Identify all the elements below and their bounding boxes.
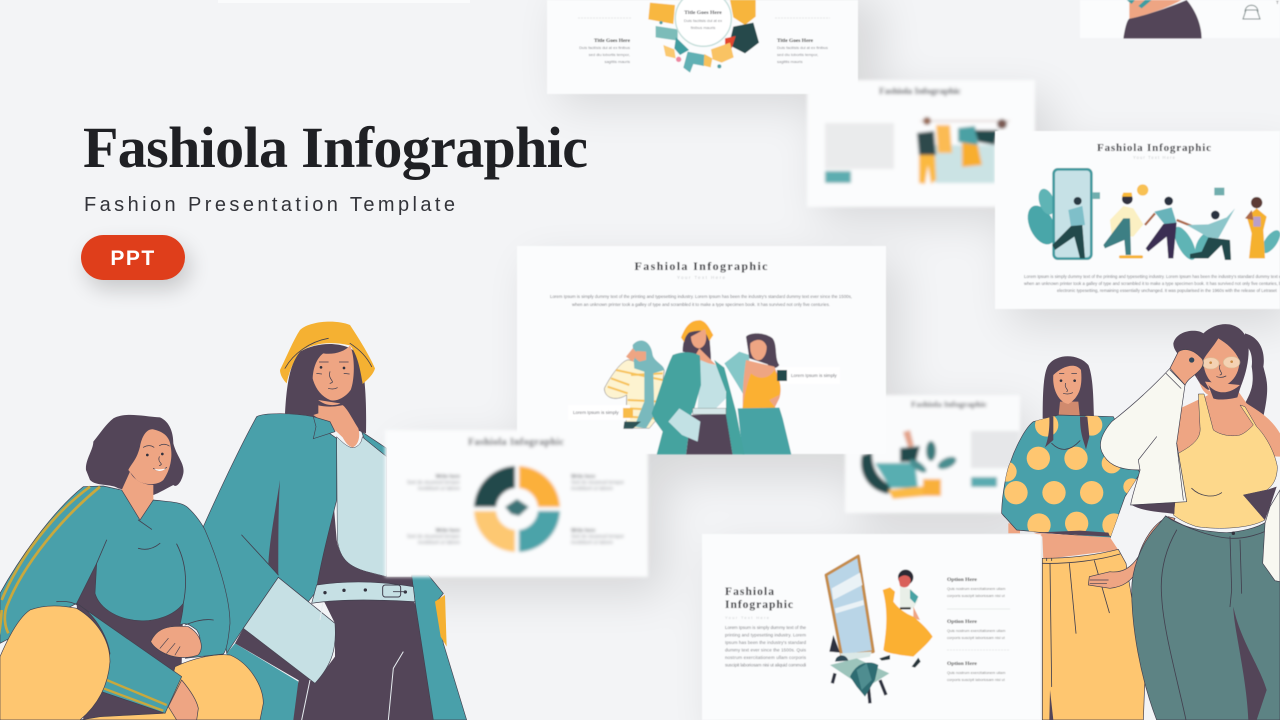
- slide title: Fashiola Infographic: [468, 437, 565, 448]
- slide body text: [725, 625, 807, 668]
- slide body text: Lorem Ipsum is simply dummy text of the printing and typesetting industry. Lorem Ipsum has been the industry's standard dummy text ever since the 1500s,: [550, 294, 852, 299]
- wheel center text: finibus mauris: [691, 25, 715, 30]
- donut labels: Sed do eiusmod tempor: [571, 534, 624, 540]
- donut labels: Sed do eiusmod tempor: [407, 480, 460, 486]
- panel: top right slide: [1080, 0, 1280, 38]
- donut labels: Write here: [436, 528, 460, 534]
- left text block: sagittis mauris: [604, 59, 630, 64]
- panel: blurred wardrobe slide: Fashiola Infographic: [879, 87, 961, 97]
- panel: top right slide: T: [1276, 0, 1279, 5]
- left text block: [579, 38, 631, 64]
- slide subtitle: Your Text Here: [1133, 155, 1176, 160]
- illustration: figure torso: [1123, 0, 1202, 38]
- illustration: woman with glasses and yellow top: [1088, 324, 1280, 720]
- illustration: phone and walking people: [1022, 169, 1280, 263]
- donut labels: incididunt ut labore: [571, 486, 613, 492]
- panel: mirror and dress slide: [702, 534, 1041, 720]
- illustration: woman in polka dot top: [997, 356, 1145, 720]
- slide body text: [550, 294, 852, 307]
- subtitle: Fashion Presentation Template: [84, 194, 455, 216]
- slide body text: [1024, 274, 1280, 293]
- right text block: sed diu lobortis tempor,: [777, 52, 818, 57]
- wheel center text: Title Goes Here: [684, 10, 722, 16]
- wheel center text: [684, 10, 722, 30]
- slide title: Fashiola Infographic: [634, 259, 768, 273]
- callout: left label: [568, 405, 633, 420]
- option list: corporis suscipit laboriosam nisi ut: [947, 594, 1006, 598]
- slide heading: Infographic: [725, 599, 793, 611]
- slide body text: Ipsum has been the industry's standard: [725, 640, 806, 645]
- left text block: Title Goes Here: [594, 38, 631, 44]
- panel: clothing wheel slide: [547, 0, 858, 94]
- title: Fashiola Infographic: [83, 115, 588, 180]
- panel: top-left sliver: [218, 0, 470, 3]
- slide body text: nostrum exercitationem ullam corporis: [725, 655, 807, 660]
- panel: blurred wardrobe slide: [807, 80, 1035, 207]
- slide heading: [725, 586, 793, 611]
- right text block: [777, 38, 828, 64]
- panel: blurred workspace slide: Fashiola Infographic: [911, 399, 987, 409]
- panel: team slide: [517, 246, 886, 454]
- wheel center text: Duis facilisis dui at ex: [684, 18, 722, 23]
- right text block: Duis facilisis dui at ex finibus: [777, 45, 828, 50]
- slide title: Fashiola Infographic: [1097, 142, 1211, 154]
- donut labels: incididunt ut labore: [571, 540, 613, 546]
- donut labels: [407, 474, 624, 546]
- option list: Quis nostrum exercitationem ullam: [947, 629, 1005, 633]
- slide body text: printing and typesetting industry. Lorem: [725, 632, 806, 638]
- slide body text: Lorem Ipsum is simply dummy text of the: [725, 625, 806, 630]
- panel: donut chart slide: [385, 430, 648, 577]
- option list: Quis nostrum exercitationem ullam: [947, 671, 1005, 675]
- callout: left label: Lorem Ipsum is simply: [573, 410, 619, 415]
- option list: corporis suscipit laboriosam nisi ut: [947, 678, 1006, 682]
- slide body text: electronic typesetting, remaining essentially unchanged. It was popularised in the 1960s with the release of Letraset: [1057, 288, 1278, 293]
- donut chart: [474, 466, 560, 552]
- illustration: clothing ring: [648, 0, 759, 73]
- slide subtitle: Your Text Here: [725, 615, 770, 620]
- right text block: Title Goes Here: [777, 38, 814, 44]
- slide subtitle: Your Text Here: [677, 275, 725, 280]
- figure: seated woman: [0, 415, 263, 720]
- left text block: sed diu lobortis tempor,: [589, 52, 630, 57]
- option list: Option Here: [947, 619, 977, 625]
- callout: right label: [777, 367, 840, 384]
- donut labels: Write here: [571, 474, 596, 480]
- slide body text: when an unknown printer took a galley of type and scrambled it to make a type specimen book. It has survived not only five centuries.: [572, 302, 830, 307]
- button: PPT: PPT: [110, 247, 156, 270]
- donut labels: Write here: [436, 474, 460, 480]
- donut labels: incididunt ut labore: [418, 540, 460, 546]
- button: PPT: [81, 235, 190, 289]
- option list: Option Here: [947, 661, 977, 667]
- donut labels: Sed do eiusmod tempor: [407, 534, 460, 540]
- option list: corporis suscipit laboriosam nisi ut: [947, 636, 1006, 640]
- illustration: woman with bucket hat and woman seated: [0, 322, 467, 720]
- option list: Option Here: [947, 577, 977, 583]
- icon: handbag: [1243, 5, 1260, 19]
- figure: woman with hat: [203, 322, 467, 720]
- panel shadows: [400, 0, 1280, 720]
- callout: right label: Lorem Ipsum is simply: [791, 373, 837, 378]
- panel: phone slide: [995, 131, 1280, 309]
- option list: Quis nostrum exercitationem ullam: [947, 587, 1005, 591]
- slide body text: dummy text ever since the 1500s. Quis: [725, 648, 807, 652]
- donut labels: incididunt ut labore: [418, 486, 460, 492]
- slide body text: suscipit laboriosam nisi ut aliquid commodi: [725, 662, 806, 668]
- illustration: three women: [604, 320, 791, 454]
- panel: blurred workspace slide: [845, 395, 1020, 513]
- donut labels: Sed do eiusmod tempor: [571, 480, 624, 486]
- donut labels: Write here: [571, 528, 596, 534]
- left text block: Duis facilisis dui at ex finibus: [579, 45, 630, 50]
- option list: [947, 577, 1010, 682]
- illustration: mirror, woman with dress and chair: [826, 556, 933, 703]
- right text block: sagittis mauris: [777, 59, 803, 64]
- slide heading: Fashiola: [725, 586, 774, 598]
